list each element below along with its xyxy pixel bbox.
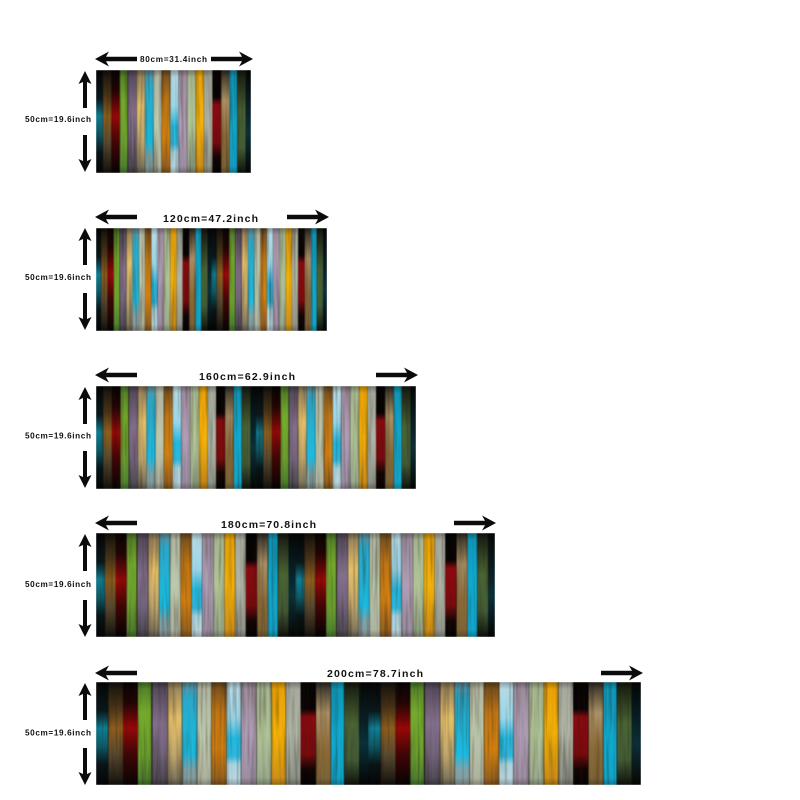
width arrow left (95, 666, 137, 680)
width arrow left (95, 368, 137, 382)
wood plank panel 180cm (96, 533, 495, 637)
wood plank panel 120cm (96, 228, 327, 331)
height arrow down (78, 293, 92, 330)
size row: 180cm (25, 516, 496, 637)
width arrow left (95, 210, 137, 224)
size row: 80cm (25, 52, 253, 173)
height label: 50cm=19.6inch (25, 432, 91, 440)
height arrow down (78, 748, 92, 785)
width label: 160cm=62.9inch (199, 371, 295, 383)
height label: 50cm=19.6inch (25, 728, 91, 738)
height arrow up (78, 71, 92, 108)
size row: 160cm (25, 368, 418, 489)
width arrow right (454, 516, 496, 530)
height arrow down (78, 600, 92, 637)
width arrow left (95, 516, 137, 530)
height label: 50cm=19.6inch (25, 273, 91, 282)
height arrow down (78, 135, 92, 172)
wood plank panel 80cm (96, 70, 251, 173)
height arrow up (78, 534, 92, 571)
height arrow down (78, 451, 92, 488)
width arrow right (287, 210, 329, 224)
height label: 50cm=19.6inch (25, 580, 91, 589)
wood plank panel 200cm (96, 682, 641, 785)
size row: 200cm (25, 666, 643, 785)
width label: 200cm=78.7inch (327, 668, 423, 680)
width arrow right (211, 52, 253, 66)
height label: 50cm=19.6inch (25, 115, 91, 124)
width label: 80cm=31.4inch (140, 55, 207, 64)
width label: 120cm=47.2inch (163, 213, 258, 225)
width label: 180cm=70.8inch (221, 519, 316, 531)
wood plank panel 160cm (96, 386, 416, 489)
width arrow right (601, 666, 643, 680)
width arrow left (95, 52, 137, 66)
width arrow right (376, 368, 418, 382)
height arrow up (78, 228, 92, 265)
height arrow up (78, 683, 92, 720)
size row: 120cm (25, 210, 329, 331)
height arrow up (78, 387, 92, 424)
